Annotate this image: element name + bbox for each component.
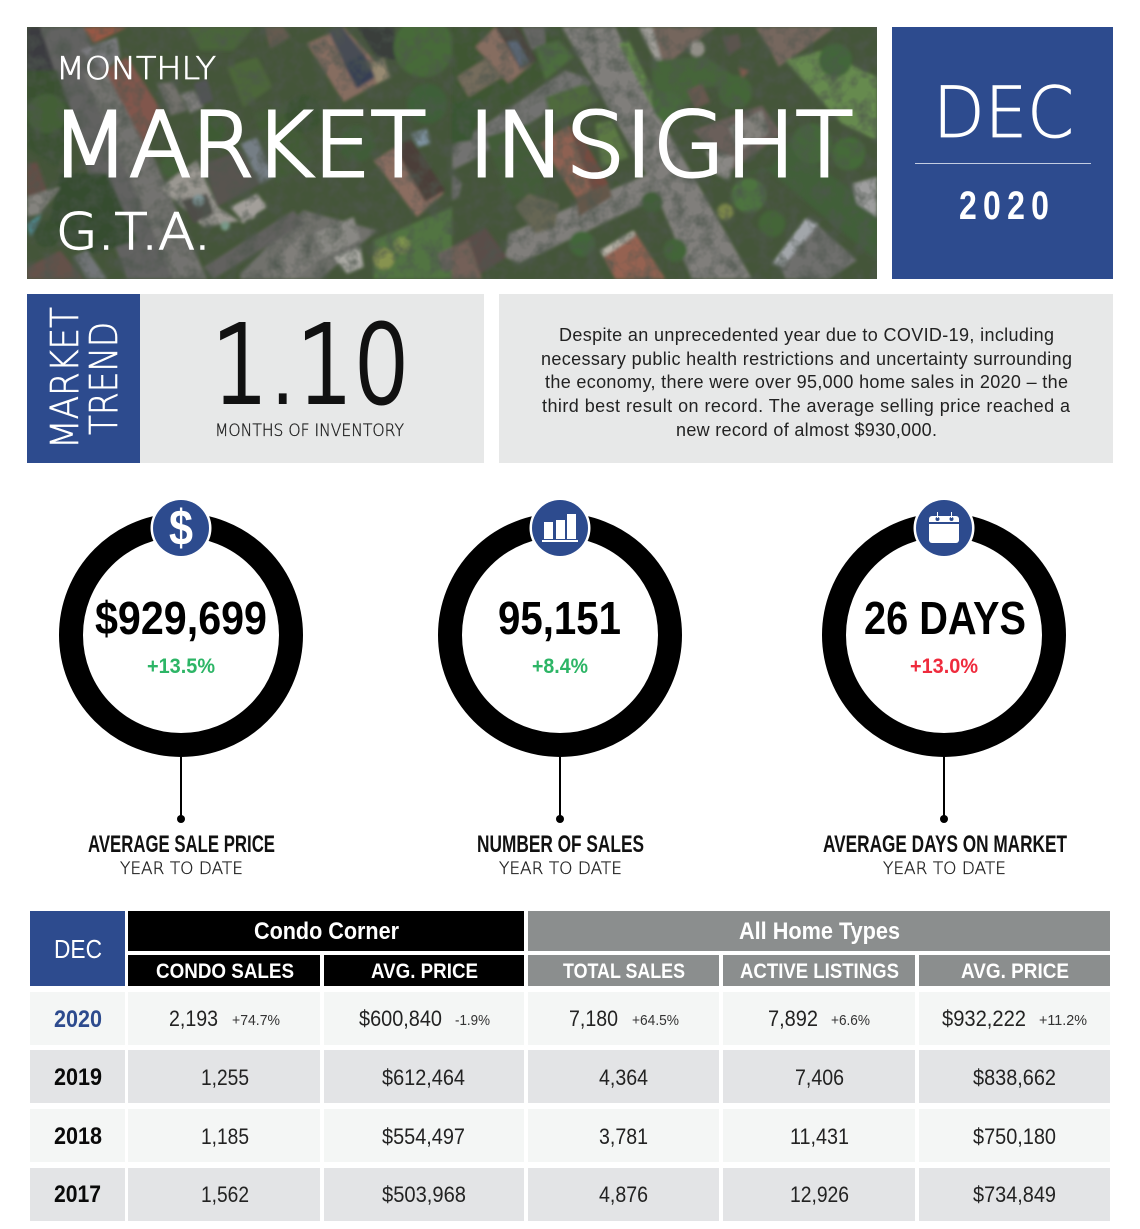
- label: AVERAGE SALE PRICE: [88, 831, 275, 858]
- row: 2019: 7,406: [795, 1065, 844, 1090]
- panel: market trend: [27, 294, 484, 463]
- commentary text: the economy, there were over 95,000 home sales in 2020 – the: [545, 372, 1068, 392]
- commentary text: [541, 325, 1072, 440]
- row: 2020: 7,892: [768, 1006, 818, 1031]
- row: 2019: 2019: [54, 1064, 102, 1091]
- row: 2020: +6.6%: [831, 1012, 870, 1029]
- month: DEC: [933, 72, 1074, 154]
- title: market insight: MARKET: [51, 93, 426, 197]
- label: monthly: MONTHLY: [56, 51, 216, 87]
- header: condo corner: CONDO SALES: [156, 960, 294, 983]
- title: market insight: INSIGHT: [468, 93, 853, 197]
- change: +13.5%: [147, 655, 215, 678]
- label: market trend: TREND: [82, 322, 126, 435]
- row: 2018: 3,781: [599, 1124, 648, 1149]
- row: 2017: $734,849: [973, 1182, 1056, 1207]
- change: +13.0%: [910, 655, 978, 678]
- row: 2018: $750,180: [973, 1124, 1056, 1149]
- caption: MONTHS OF INVENTORY: [215, 421, 404, 441]
- row: 2018: 2018: [54, 1123, 102, 1150]
- row: 2018: [30, 1109, 1110, 1162]
- row: 2020: 2020: [54, 1006, 102, 1033]
- row: 2017: 2017: [54, 1181, 101, 1208]
- row: 2019: $612,464: [382, 1065, 465, 1090]
- header: all home types: All Home Types: [739, 918, 900, 945]
- value: months of inventory: 1.10: [212, 304, 410, 428]
- row: 2019: $838,662: [973, 1065, 1056, 1090]
- header: dec: [30, 911, 125, 986]
- row: 2020: +74.7%: [232, 1012, 280, 1029]
- header: condo corner: [128, 911, 524, 986]
- header: condo corner: Condo Corner: [254, 918, 399, 945]
- row: 2020: [30, 992, 1110, 1045]
- header: all home types: [528, 911, 1110, 986]
- label: market trend: MARKET: [43, 307, 87, 449]
- row: 2020: +11.2%: [1039, 1012, 1087, 1029]
- title: market insight: [51, 93, 853, 197]
- stat: number of sales: [450, 498, 670, 879]
- row: 2019: 4,364: [599, 1065, 648, 1090]
- header: dec: DEC: [54, 934, 102, 964]
- row: 2018: 11,431: [790, 1124, 849, 1149]
- row: 2017: [30, 1168, 1110, 1221]
- row: 2020: -1.9%: [455, 1012, 490, 1029]
- icon: calendar: [914, 498, 974, 558]
- table: [30, 911, 1110, 1221]
- header banner with aerial photo: [27, 17, 877, 279]
- sublabel: YEAR TO DATE: [499, 859, 622, 879]
- header: all home types: AVG. PRICE: [961, 960, 1069, 983]
- icon: dollar: [150, 498, 212, 558]
- row: 2019: 1,255: [201, 1065, 249, 1090]
- row: 2018: $554,497: [382, 1124, 465, 1149]
- stat: average sale price: [71, 498, 291, 879]
- row: 2020: $932,222: [942, 1006, 1026, 1031]
- row: 2020: 2,193: [169, 1006, 218, 1031]
- icon: dollar: $: [169, 500, 193, 556]
- value: 95,151: [498, 592, 621, 644]
- row: 2018: 1,185: [201, 1124, 249, 1149]
- commentary text: third best result on record. The average selling price reached a: [542, 396, 1071, 416]
- commentary text: Despite an unprecedented year due to COVID-19, including: [559, 325, 1054, 345]
- year: 2020: [959, 183, 1049, 228]
- value: 26 DAYS: [864, 592, 1026, 644]
- label: NUMBER OF SALES: [477, 831, 644, 858]
- row: 2020: $600,840: [359, 1006, 442, 1031]
- header: condo corner: AVG. PRICE: [371, 960, 478, 983]
- sublabel: YEAR TO DATE: [883, 859, 1006, 879]
- panel: commentary: [499, 294, 1113, 463]
- stat: average days on market: [823, 498, 1067, 879]
- sublabel: YEAR TO DATE: [120, 859, 243, 879]
- row: 2017: 1,562: [201, 1182, 249, 1207]
- label: G.T.A.: G.T.A.: [56, 203, 211, 261]
- icon: bar chart: [530, 498, 590, 558]
- row: 2020: +64.5%: [632, 1012, 679, 1029]
- row: 2019: [30, 1050, 1110, 1103]
- row: 2020: 7,180: [569, 1006, 618, 1031]
- label: market trend: [43, 307, 126, 449]
- row: 2017: 4,876: [599, 1182, 648, 1207]
- value: $929,699: [95, 592, 267, 644]
- commentary text: necessary public health restrictions and uncertainty surrounding: [541, 349, 1072, 369]
- header: all home types: TOTAL SALES: [563, 960, 685, 983]
- row: 2017: 12,926: [790, 1182, 849, 1207]
- header: all home types: ACTIVE LISTINGS: [740, 960, 899, 983]
- change: +8.4%: [532, 655, 588, 678]
- commentary text: new record of almost $930,000.: [676, 420, 937, 440]
- row: 2017: $503,968: [382, 1182, 466, 1207]
- panel: date: [892, 27, 1113, 279]
